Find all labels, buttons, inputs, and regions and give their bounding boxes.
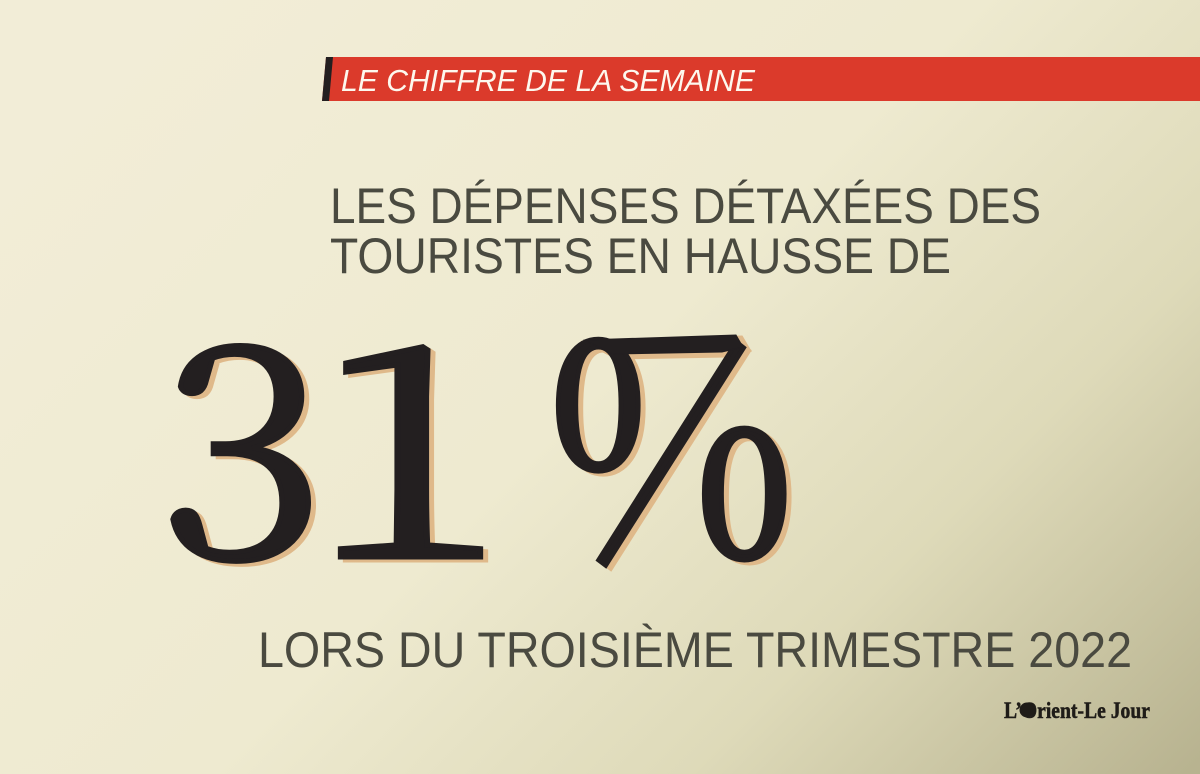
big number: 31 %: 3 bbox=[158, 217, 325, 642]
banner: le chiffre de la semaine: LE CHIFFRE DE LA SEMAINE bbox=[341, 63, 755, 98]
subheading: troisième trimestre: LORS DU TROISIÈME TRIMESTRE 2022 bbox=[258, 622, 1132, 678]
heading: dépenses détaxées: TOURISTES EN HAUSSE DE bbox=[330, 228, 951, 284]
big number: 31 %: 3 bbox=[163, 220, 330, 645]
heading: dépenses détaxées bbox=[330, 178, 1041, 284]
big number: 31 %: % bbox=[546, 219, 797, 642]
banner: le chiffre de la semaine bbox=[322, 57, 1200, 101]
big number: 31 %: 1 bbox=[311, 218, 504, 642]
big number: 31 % bbox=[158, 217, 802, 645]
big number: 31 %: 1 bbox=[316, 221, 509, 645]
big number: 31 %: % bbox=[551, 222, 802, 645]
logo: L'Orient-Le Jour: L’Orient-Le Jour bbox=[1004, 698, 1150, 723]
heading: dépenses détaxées: LES DÉPENSES DÉTAXÉES DES bbox=[330, 178, 1041, 234]
